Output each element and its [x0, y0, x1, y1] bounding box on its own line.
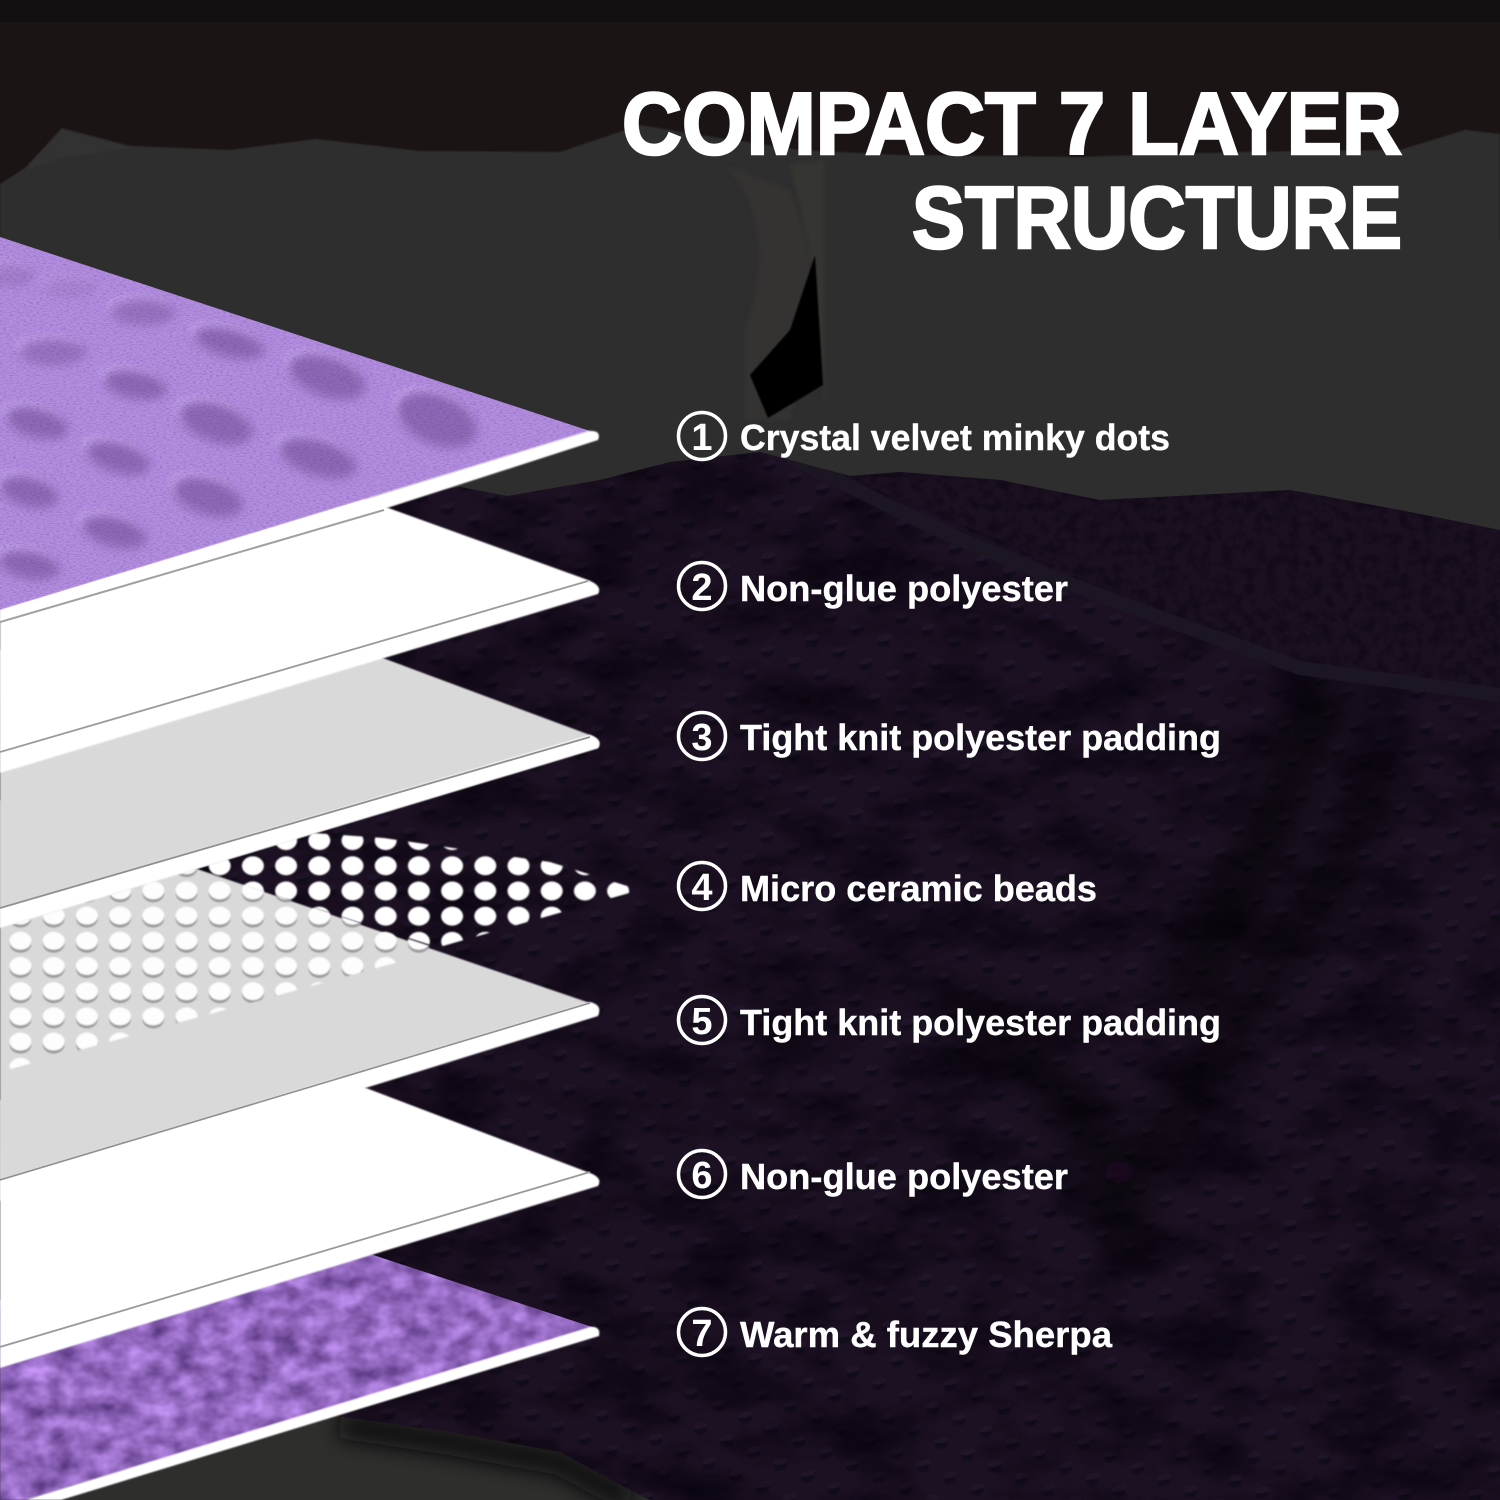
title: COMPACT 7 LAYER: [622, 74, 1402, 173]
label 7: Warm & fuzzy Sherpa: [740, 1314, 1113, 1355]
layer 4: micro ceramic beads on blanket: [208, 832, 630, 947]
label 6: Non-glue polyester: [740, 1156, 1068, 1197]
label 1: Crystal velvet minky dots: [740, 417, 1170, 458]
label 3: Tight knit polyester padding: [740, 717, 1221, 758]
bottom shadow under blanket: [340, 1425, 630, 1500]
label 5: Tight knit polyester padding: [740, 1002, 1221, 1043]
blanket fold lumps: [200, 460, 1500, 1500]
title: STRUCTURE: [912, 168, 1402, 267]
layer 7: warm sherpa: [0, 1254, 600, 1500]
label 1: 1: [691, 417, 713, 459]
layer 3: tight knit polyester padding: [0, 590, 599, 928]
minky dot highlights: [0, 261, 456, 560]
layer 6: non-glue polyester: [0, 1025, 599, 1368]
label 4: Micro ceramic beads: [740, 868, 1097, 909]
sherpa reverse corner: [842, 474, 1500, 684]
label 3: 3: [691, 717, 713, 759]
label 5: 5: [691, 1001, 713, 1043]
title: [622, 74, 1402, 267]
layer 2: non-glue polyester: [0, 440, 599, 773]
label 4: 4: [691, 867, 713, 909]
label 6: 6: [691, 1155, 713, 1197]
label 2: Non-glue polyester: [740, 568, 1068, 609]
layer 5 strip: [0, 1002, 599, 1201]
minky dots: [0, 264, 485, 584]
layer 4: beads showing through padding: [9, 870, 430, 1070]
weighted blanket: [0, 452, 1500, 1500]
label 7: 7: [691, 1313, 713, 1355]
layer 5: tight knit polyester padding: [0, 800, 590, 1180]
layer 1: crystal velvet minky dots: [0, 230, 600, 622]
label 2: 2: [691, 567, 713, 609]
blanket fold shadows: [960, 700, 1380, 1240]
